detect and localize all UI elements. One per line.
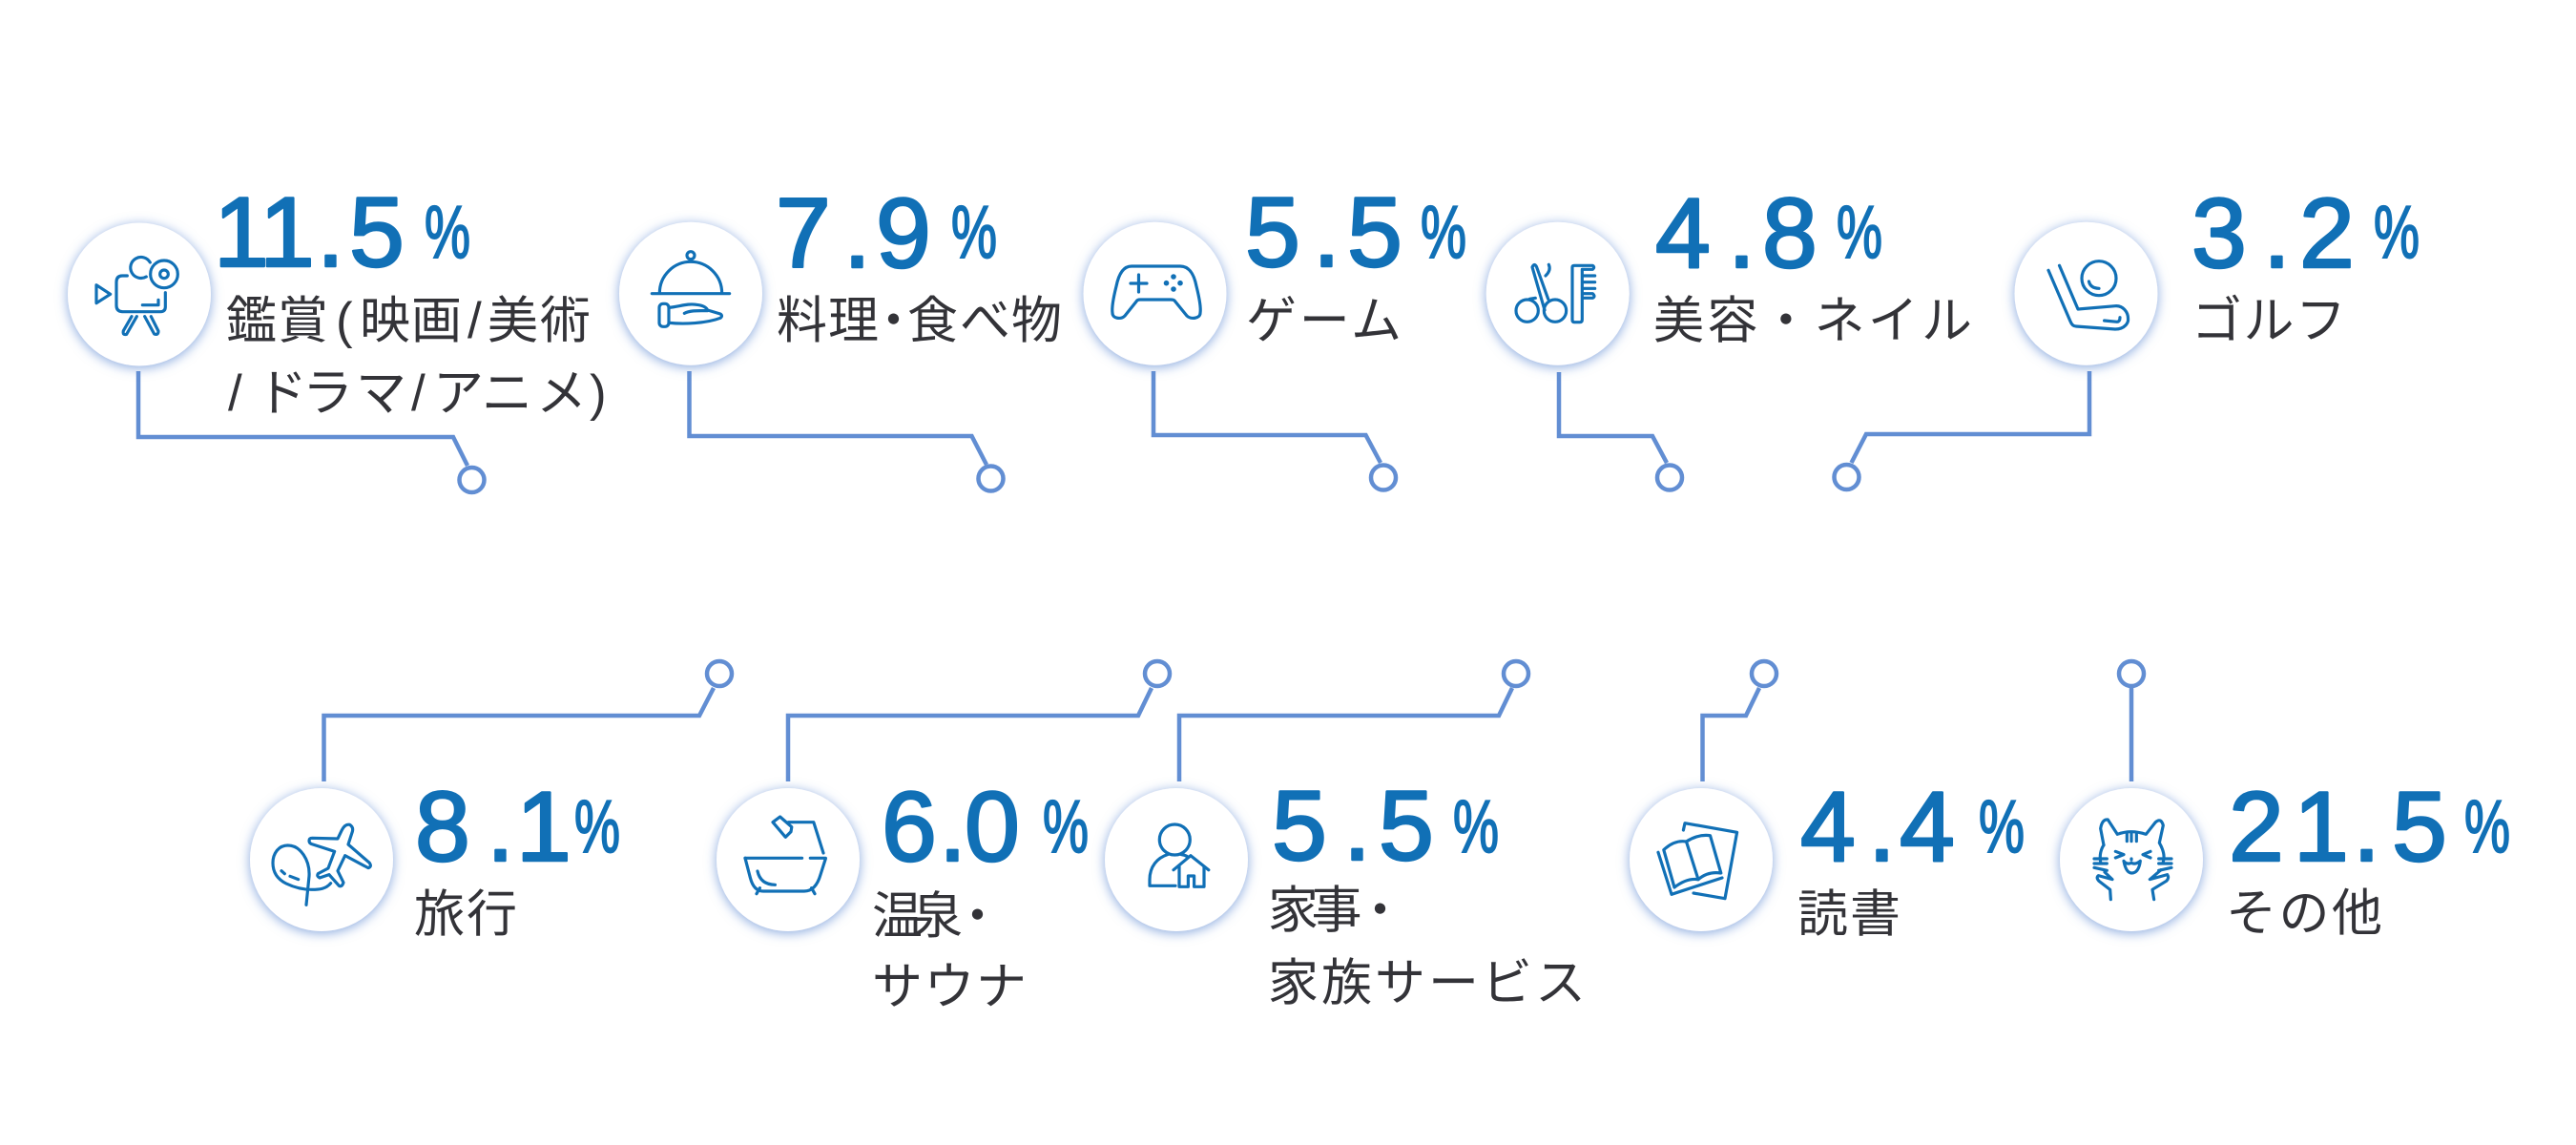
circle badge (1630, 788, 1773, 931)
icon: open book (1658, 823, 1737, 899)
value: 6.0 (882, 772, 1020, 883)
icon: film camera (96, 257, 177, 335)
item: ゴルフ 3.2% (1834, 178, 2420, 489)
label: 読書 (1797, 886, 1901, 943)
circle badge (1105, 788, 1248, 931)
circle badge (2060, 788, 2203, 931)
value: 5.5 (1245, 177, 1402, 288)
value: 11.5 (214, 177, 405, 288)
icon: person and house (1150, 824, 1209, 886)
circle badge (1084, 222, 1227, 365)
value: % (2374, 190, 2420, 274)
value: % (574, 784, 620, 868)
value: 5.5 (1272, 771, 1434, 882)
circle badge (68, 223, 211, 366)
value: % (1421, 190, 1466, 274)
label (872, 888, 1027, 1015)
connector (1559, 372, 1682, 490)
icon: map pin and airplane (273, 824, 370, 905)
item: 料理・食べ物 7.9% (619, 178, 1062, 490)
connector (1834, 371, 2089, 489)
circle badge (2015, 222, 2158, 365)
item: その他 21.5% (2060, 661, 2510, 942)
item: 温泉・サウナ 6.0% (717, 661, 1170, 1015)
icon: food cloche and hand (652, 252, 730, 326)
value: % (1979, 784, 2025, 868)
connector (2119, 661, 2144, 781)
label: /ドラマ/アニメ) (228, 365, 607, 422)
connector (138, 371, 485, 492)
label: 鑑賞(映画/美術 (226, 293, 591, 349)
item: 旅行 8.1% (250, 661, 732, 943)
label: ゴルフ (2192, 293, 2346, 349)
circle badge (1486, 222, 1630, 365)
circle badge (250, 788, 393, 931)
connector (1179, 661, 1528, 781)
icon: bathtub and shower (745, 817, 825, 894)
label: 温泉・ (872, 888, 1003, 945)
label: ゲーム (1246, 293, 1402, 349)
connector (1153, 371, 1396, 490)
value: 4.4 (1800, 772, 1955, 883)
connector (788, 661, 1170, 781)
value: % (1837, 190, 1882, 274)
item: 読書 4.4% (1630, 661, 2025, 943)
label: その他 (2226, 885, 2382, 942)
value (882, 772, 1089, 883)
connector (1702, 661, 1776, 781)
item: ゲーム 5.5% (1084, 177, 1466, 490)
value: % (951, 190, 997, 274)
value: % (2464, 784, 2510, 868)
icon: smiling cat (2094, 820, 2171, 900)
item: 鑑賞 11.5% (68, 177, 607, 492)
item: 美容・ネイル 4.8% (1486, 178, 1972, 490)
value: 7.9 (776, 178, 931, 289)
item: 家事・家族サービス 5.5% (1105, 661, 1586, 1011)
value: % (425, 190, 470, 274)
label: 家事・ (1268, 883, 1405, 939)
icon: scissors and comb (1516, 264, 1595, 323)
icon: game controller (1112, 266, 1200, 318)
label: 料理・食べ物 (777, 293, 1062, 349)
value: % (1043, 784, 1089, 868)
label: 美容・ネイル (1653, 293, 1972, 349)
label (1268, 883, 1586, 1011)
value (1800, 772, 2025, 883)
value: 8.1 (415, 772, 571, 883)
label: 旅行 (414, 886, 517, 943)
label: サウナ (872, 959, 1027, 1015)
value: 3.2 (2192, 178, 2355, 289)
circle badge (619, 222, 762, 365)
connector (689, 371, 1004, 490)
connector (324, 661, 732, 781)
circle badge (717, 788, 860, 931)
value: 4.8 (1655, 178, 1818, 289)
label (226, 293, 607, 422)
icon: golf ball and club (2048, 261, 2129, 329)
label: 家族サービス (1268, 955, 1586, 1011)
value: 21.5 (2229, 772, 2447, 883)
value: % (1453, 784, 1499, 868)
